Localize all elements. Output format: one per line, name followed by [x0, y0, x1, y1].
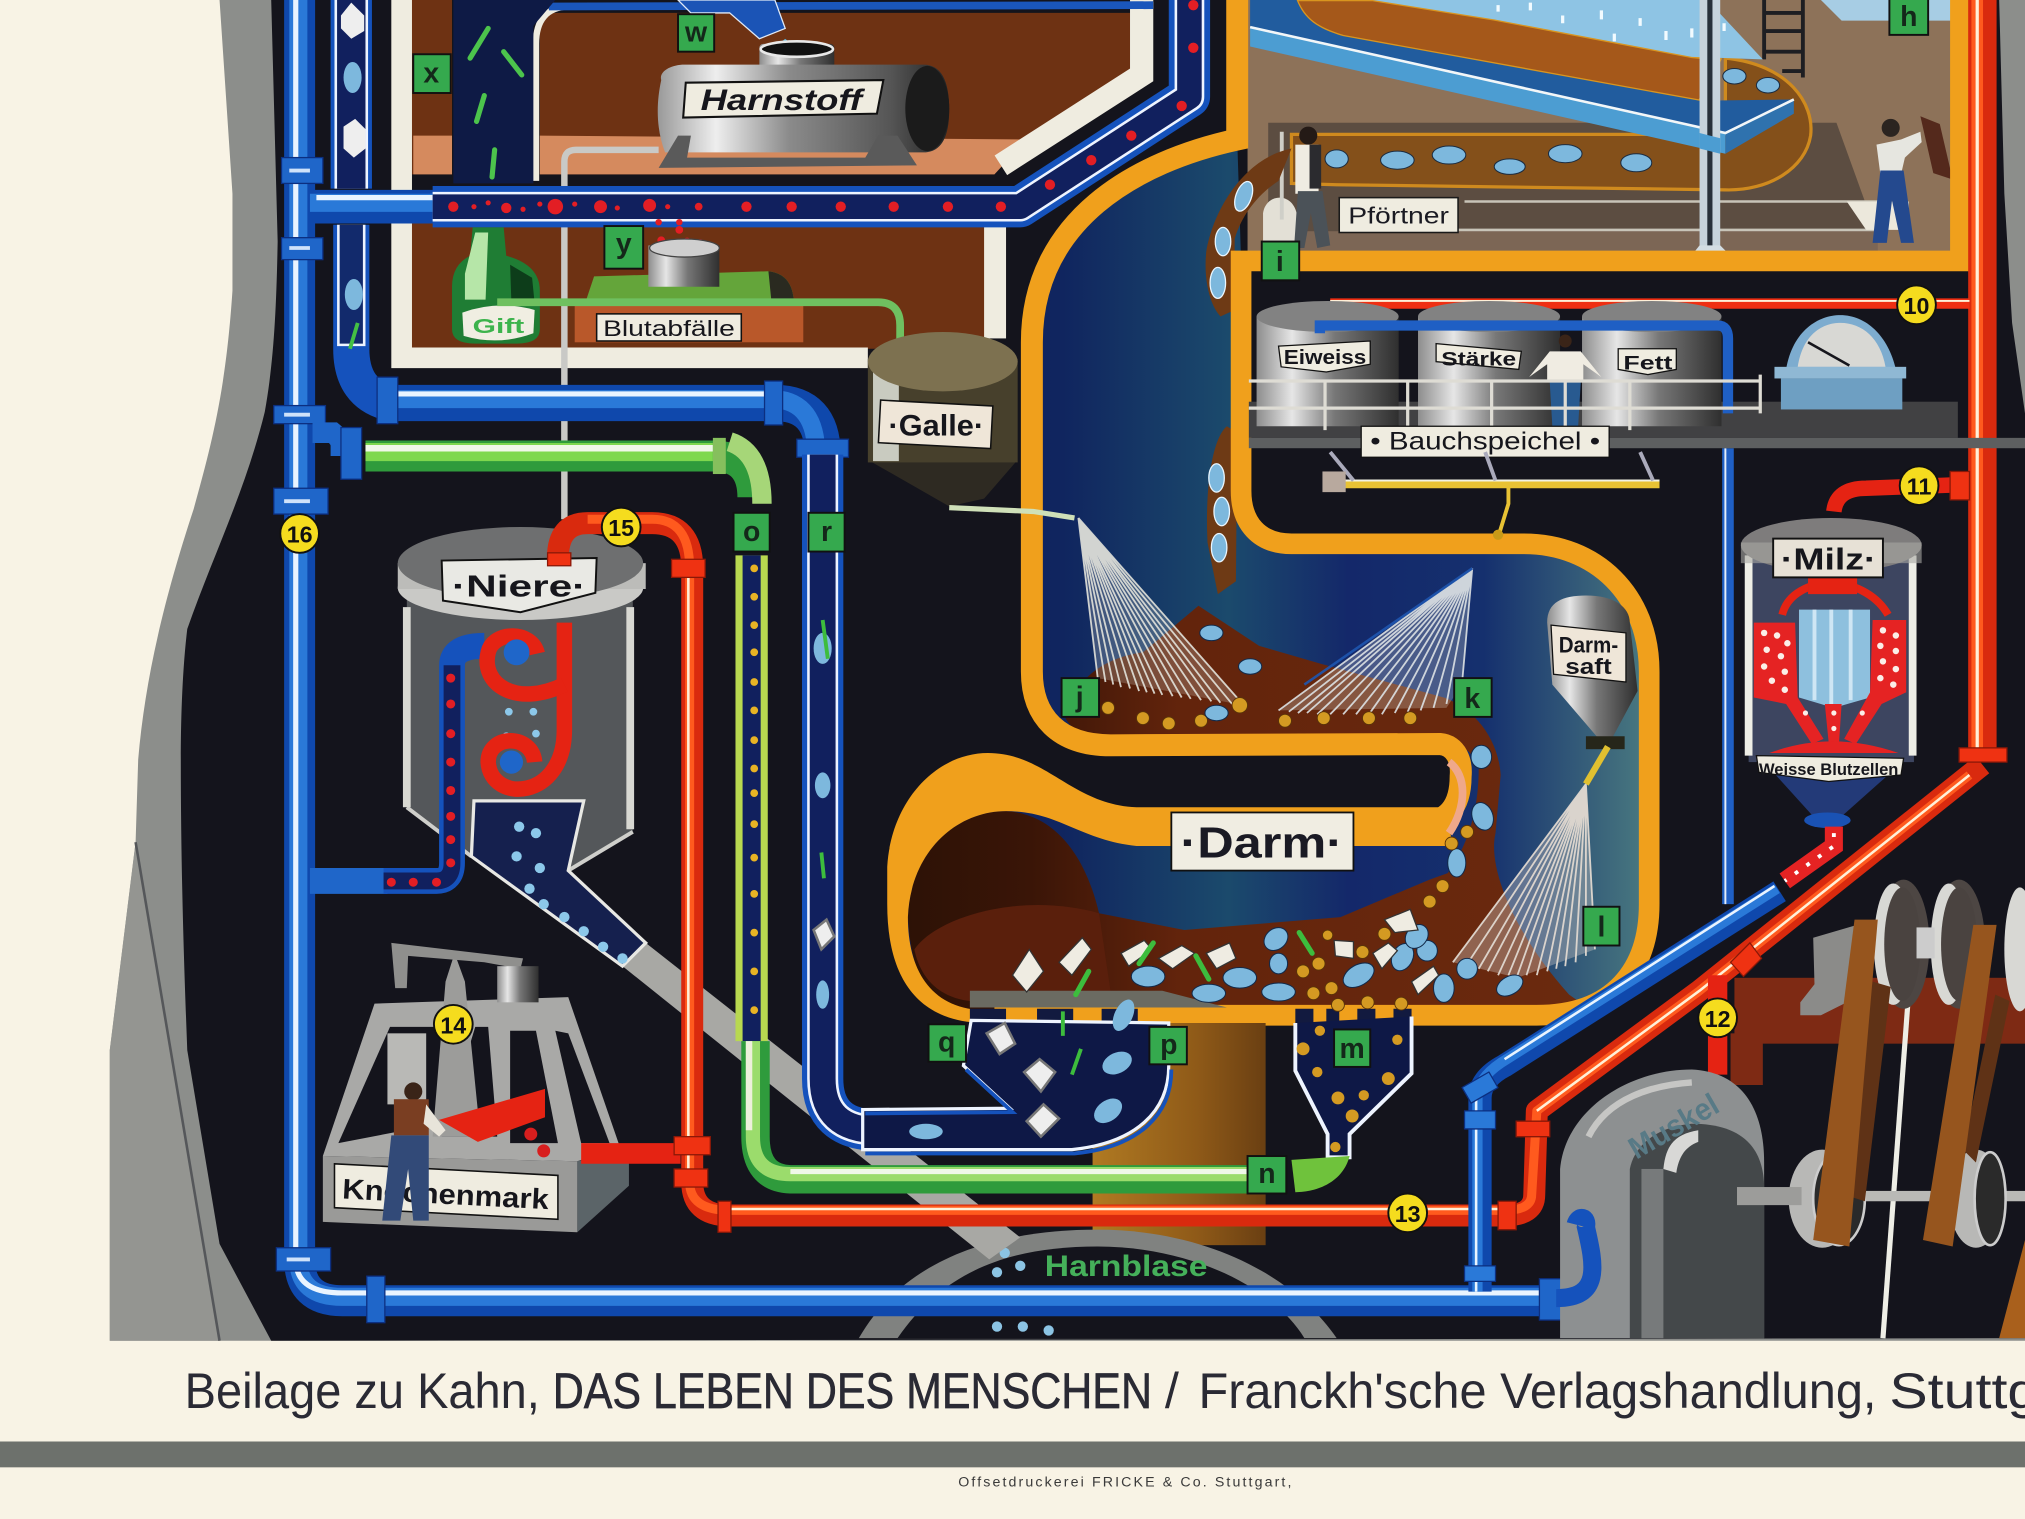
blue elbow over engine [1556, 1218, 1592, 1298]
label: Darmsaft [1551, 625, 1626, 682]
golden column behind [1093, 1023, 1266, 1245]
pulleys [1800, 880, 2025, 1015]
marker i [1262, 242, 1299, 280]
marker h [1889, 0, 1928, 35]
red marrow slab [439, 1089, 545, 1142]
marker l: l [1597, 911, 1605, 943]
label: Bauchspeichel [1361, 426, 1609, 457]
spray l [1453, 784, 1595, 978]
marker m: m [1340, 1033, 1365, 1065]
green lymph pipe [365, 438, 1250, 1179]
tank: Stärke [1418, 301, 1560, 426]
marker m [1334, 1029, 1370, 1067]
machine: Knochenmark [323, 943, 629, 1232]
stomach shelf [1250, 0, 1794, 133]
fat drops [1102, 698, 1474, 1011]
blood channel [433, 0, 1198, 247]
label: Weisse Blutzellen: Weisse Blutzellen [1759, 760, 1898, 779]
marker y: y [616, 228, 632, 260]
food particles in intestine [1012, 625, 1527, 1011]
label: Stärke [1436, 344, 1521, 371]
marker k: k [1464, 683, 1480, 715]
label: Galle: ·Galle· [889, 409, 984, 442]
urea channel x [453, 0, 555, 183]
label: Niere [442, 558, 597, 612]
green bile pipe [497, 302, 900, 358]
marker k [1454, 678, 1492, 717]
connector from vein to green pipe [313, 433, 356, 446]
number 11 [1900, 466, 1938, 505]
pancreas juice pipe [1343, 481, 1660, 487]
large blue pipe to r channel [377, 377, 848, 457]
label: Pförtner [1339, 198, 1458, 232]
number 16 [280, 514, 319, 553]
stomach chamber [1248, 0, 1955, 253]
green rods [1076, 933, 1312, 995]
number 10: 10 [1904, 293, 1929, 319]
chute to Harnstoff [678, 0, 796, 49]
marker n [1248, 1156, 1286, 1194]
stomach contents [1297, 0, 1720, 101]
tank: Fett [1582, 301, 1722, 426]
bottle: Darmsaft [1547, 595, 1638, 784]
grey footer band [0, 1442, 2025, 1467]
label: Stärke: Stärke [1441, 349, 1516, 371]
spleen core [1799, 610, 1870, 708]
lower wheels [1789, 1150, 2006, 1248]
footer publisher line: / [1165, 1362, 1179, 1419]
bladder [859, 1230, 1337, 1338]
marker j: j [1075, 682, 1084, 714]
food in side channel [341, 3, 365, 349]
panel: urea and waste chamber [402, 0, 1153, 358]
spleen red chambers [1754, 623, 1824, 744]
label: Darm [1171, 812, 1353, 871]
tank: Harnstoff [658, 41, 949, 168]
label: Niere: ·Niere· [452, 569, 586, 604]
number 11: 11 [1907, 474, 1931, 500]
main vein pipe [274, 0, 1563, 1323]
pool food [814, 633, 1139, 1139]
marker r [808, 513, 845, 552]
red flanges [548, 471, 2007, 1232]
worker: right [1873, 116, 1953, 243]
body shading band [110, 842, 220, 1341]
artery red pipe [558, 0, 1982, 1215]
label: Harnstoff: Harnstoff [701, 84, 866, 117]
white drive belt [1883, 904, 1915, 1338]
marker i: i [1276, 246, 1284, 278]
number 12: 12 [1705, 1006, 1731, 1032]
label: Harnblase: Harnblase [1045, 1250, 1208, 1283]
railing [1249, 375, 1760, 430]
tank: Galle [868, 332, 1074, 518]
ladder [1764, 0, 1803, 78]
spleen outlet [1785, 827, 1834, 881]
label: Darm: ·Darm· [1180, 819, 1343, 868]
label: Fett [1618, 349, 1676, 375]
shaft lower [1724, 1191, 2025, 1201]
engine body [1560, 1070, 1764, 1338]
kidney droplets [502, 708, 628, 964]
bile outlet [949, 508, 1074, 518]
blue pipe pancreas [1320, 326, 1728, 413]
marker h: h [1900, 1, 1917, 33]
marker p: p [1160, 1029, 1177, 1061]
body contour line [136, 842, 220, 1341]
lower chyme sack [1291, 58, 1811, 190]
footer publisher line [185, 1362, 2025, 1419]
fat drops in o channel [750, 564, 758, 1014]
label: Muskel: Muskel [1622, 1087, 1725, 1166]
tank: Blutabfälle [575, 239, 803, 342]
marker l [1583, 907, 1619, 946]
footer publisher line: DAS LEBEN DES MENSCHEN [553, 1362, 1152, 1419]
upper right shelf [1821, 0, 1953, 21]
number 16: 16 [287, 521, 313, 548]
spray k [1279, 568, 1472, 714]
shaft stub [1737, 1187, 1802, 1205]
label: Darmsaft: Darm- [1559, 632, 1618, 657]
marker w [678, 14, 714, 52]
absorption pool [863, 1020, 1169, 1150]
urine duct to bladder [622, 943, 1020, 1259]
vein branch into blood channel [310, 198, 439, 207]
label: Knochenmark: Knochenmark [342, 1173, 550, 1216]
blob reddish bottom [914, 905, 1111, 1001]
number 13 [1388, 1194, 1427, 1232]
label: Galle [878, 400, 993, 449]
letter markers [413, 0, 1928, 1194]
label: Blutabfälle [597, 314, 741, 341]
label: Knochenmark [334, 1164, 558, 1219]
marker p [1149, 1027, 1187, 1064]
number markers [280, 285, 1938, 1232]
marker n: n [1258, 1158, 1276, 1190]
funnel m [1295, 1017, 1412, 1157]
r channel and pool [814, 455, 1171, 1153]
label: Darmsaft: saft [1565, 654, 1613, 679]
worker: marrow [382, 1082, 446, 1221]
vein to spleen [1462, 448, 1780, 1292]
label: Eiweiss: Eiweiss [1284, 346, 1366, 369]
footer publisher line: Beilage zu Kahn, [185, 1362, 540, 1419]
marker w: w [684, 16, 708, 48]
red blood cells [448, 0, 1198, 247]
number 12 [1698, 998, 1737, 1037]
marker x [413, 54, 451, 93]
gatekeeper wheel [1263, 198, 1299, 253]
tank: Niere [310, 527, 646, 966]
intestine interior [898, 140, 1649, 1015]
number 14: 14 [440, 1012, 466, 1038]
bottle: Gift [452, 227, 540, 344]
label: Milz: ·Milz· [1781, 542, 1876, 577]
number 15: 15 [608, 515, 634, 541]
red kidney coil [487, 623, 564, 789]
gauge [1774, 315, 1906, 409]
flanges [274, 158, 1563, 1323]
muscle engine [1556, 880, 2025, 1338]
marker q: q [938, 1026, 955, 1058]
corner belt [1999, 1240, 2025, 1338]
marker o [734, 513, 770, 552]
marker r: r [821, 516, 832, 548]
label: Blutabfälle: Blutabfälle [603, 316, 735, 341]
worker: pancreas [1529, 335, 1601, 426]
number 10 [1897, 285, 1936, 324]
intestine food: upper chyme band [908, 606, 1591, 1010]
footer publisher line: Franckh'sche Verlagshandlung, [1198, 1362, 1876, 1419]
cubes [1012, 909, 1439, 995]
label: Eiweiss [1279, 341, 1370, 372]
tank: Eiweiss [1257, 301, 1399, 426]
blue kidney coil channel [310, 646, 484, 881]
marker o: o [743, 516, 760, 548]
spray j [1078, 518, 1244, 705]
tank: Milz [1741, 518, 1922, 881]
number 14 [434, 1005, 473, 1044]
label: Bauchspeichel: • Bauchspeichel • [1370, 428, 1600, 456]
number 13: 13 [1395, 1201, 1421, 1227]
intestine wall [887, 0, 1960, 1023]
thin grey urea pipe [564, 150, 659, 519]
marker q [929, 1024, 966, 1062]
marker x: x [423, 58, 439, 90]
label: Pförtner: Pförtner [1348, 202, 1449, 228]
red branches [1834, 484, 1969, 512]
number 15 [602, 508, 641, 546]
blue ovals [1131, 745, 1527, 1002]
drive belts [1844, 982, 1891, 1201]
rust frame bar [1734, 978, 2025, 1044]
spleen funnel [1776, 775, 1888, 816]
dark vein side channel: upper [351, 0, 390, 403]
label: Harnstoff [683, 80, 883, 118]
blue food in sack [1325, 68, 1780, 174]
label: Milz [1773, 539, 1883, 577]
panel: pancreas [1249, 301, 2025, 540]
green outlet n [1291, 1156, 1350, 1192]
support pole [1694, 0, 1727, 252]
chyme ovals [1200, 625, 1262, 721]
marker y [604, 226, 643, 269]
marker j [1062, 678, 1099, 717]
bottle: Gift: Gift [473, 315, 524, 338]
printer credit: Offsetdruckerei FRICKE & Co. Stuttgart, [958, 1475, 1291, 1491]
worker: gatekeeper [1280, 127, 1330, 248]
intestine food: drip pieces [1206, 149, 1291, 594]
label: Fett: Fett [1623, 352, 1673, 374]
